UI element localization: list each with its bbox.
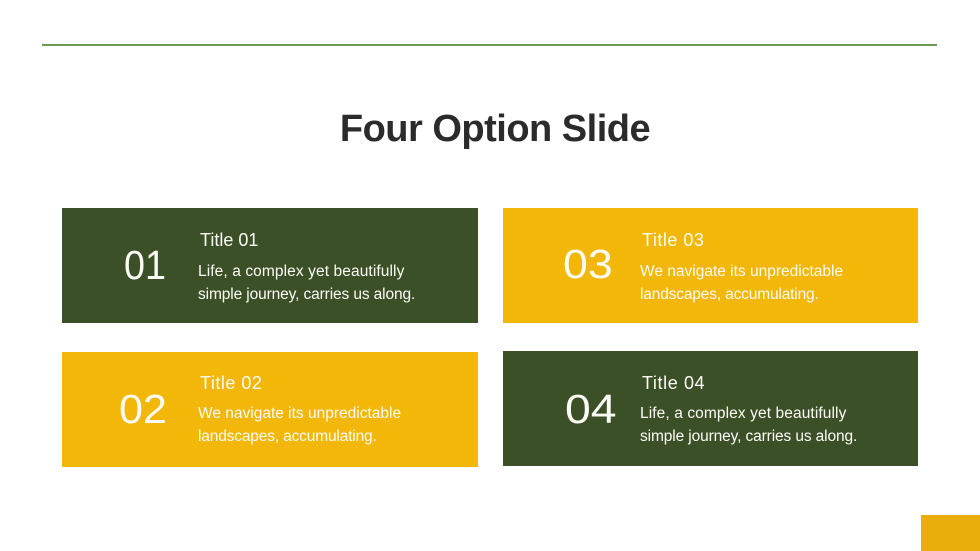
text: option 03	[640, 263, 843, 303]
panel: option 03	[503, 208, 918, 323]
heading: title 04: Title 04	[642, 373, 705, 393]
corner accent block	[921, 515, 980, 551]
heading: title 03: Title 03	[642, 230, 704, 250]
panel: option 04	[503, 351, 918, 466]
text: option 04	[640, 405, 857, 445]
text: option 03: landscapes, accumulating.	[640, 286, 819, 303]
text: option 02: We navigate its unpredictable	[198, 405, 401, 422]
number 03: 03	[563, 241, 613, 287]
panel: option 02	[62, 352, 478, 467]
text: option 02: landscapes, accumulating.	[198, 428, 377, 445]
text: option 01	[198, 263, 415, 303]
top rule	[42, 44, 937, 46]
number 02: 02	[119, 386, 167, 432]
text: option 01: simple journey, carries us along.	[198, 286, 415, 303]
number 04: 04	[565, 386, 617, 432]
heading: title 02: Title 02	[200, 373, 262, 393]
title: Four Option Slide	[340, 108, 650, 150]
text: option 04: simple journey, carries us along.	[640, 428, 857, 445]
number 01: 01	[124, 242, 166, 288]
text: option 02	[198, 405, 401, 445]
text: option 03: We navigate its unpredictable	[640, 263, 843, 280]
text: option 01: Life, a complex yet beautifully	[198, 263, 404, 280]
heading: title 01: Title 01	[200, 230, 258, 250]
panel: option 01	[62, 208, 478, 323]
text: option 04: Life, a complex yet beautifully	[640, 405, 846, 422]
